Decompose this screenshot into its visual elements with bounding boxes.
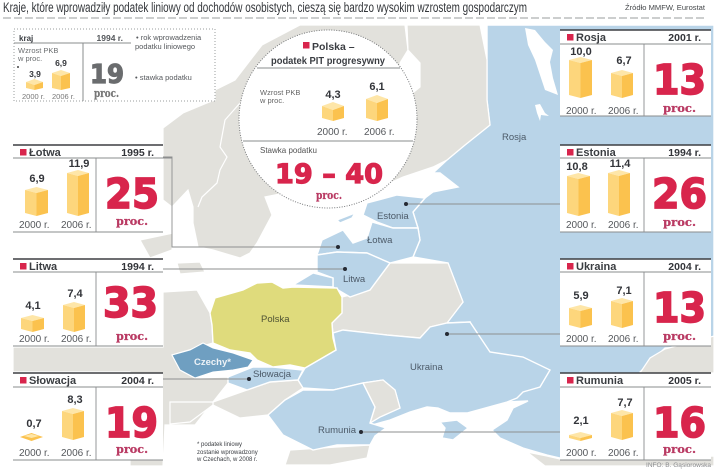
panel: Ukraina: proc. (663, 330, 696, 343)
Romania (268, 383, 386, 450)
panel: Rumunia: 2000 r. (566, 448, 597, 459)
panel: Litwa: 4,1 (25, 300, 41, 312)
Estonia (363, 195, 425, 228)
panel: Polska circle: w proc. (259, 96, 284, 105)
legend: 6,9 (55, 58, 67, 68)
Ukraine (298, 322, 550, 425)
panel: Ukraina: Ukraina (576, 261, 617, 273)
Crimea (440, 420, 468, 440)
Balkans (170, 402, 213, 424)
map labels: Litwa (343, 274, 366, 285)
panel: Rosja: 2000 r. (566, 106, 597, 117)
panel: Rosja (560, 30, 711, 117)
panel: Ukraina: 7,1 (616, 285, 632, 297)
credit: INFO: B. Gąsiorowska (646, 462, 711, 469)
panel: Łotwa: 11,9 (69, 158, 89, 170)
panel: Łotwa: 25 (105, 170, 159, 218)
panel: Łotwa: 2000 r. (19, 220, 50, 231)
Belarus (332, 263, 463, 338)
map labels: Czechy* (194, 357, 231, 368)
panel: Polska circle: proc. (316, 189, 342, 202)
map labels: Rumunia (318, 425, 357, 436)
panel: Ukraina: 2006 r. (608, 334, 639, 345)
panel: Łotwa: proc. (116, 215, 148, 228)
Scandinavia (163, 25, 408, 258)
connector lines (163, 157, 560, 434)
panel: Litwa: 7,4 (67, 288, 84, 300)
footnote: zostanie wprowadzony (197, 450, 258, 456)
legend: 3,9 (29, 69, 41, 79)
panel: Słowacja: 2004 r. (121, 375, 154, 387)
panel: Rumunia: 7,7 (617, 397, 633, 409)
panel: Polska circle: 4,3 (325, 89, 341, 101)
panel: Estonia: proc. (663, 216, 696, 229)
panel: Słowacja: Słowacja (29, 375, 77, 387)
panel: Estonia: 11,4 (610, 158, 631, 170)
panel: Rumunia: 2006 r. (608, 448, 639, 459)
panel: Litwa: proc. (116, 330, 148, 343)
panel: Łotwa (13, 145, 172, 232)
footnote (196, 442, 258, 463)
panel: Estonia: 26 (652, 170, 707, 218)
legend: Wzrost PKB (18, 46, 58, 55)
panel: Litwa: 1994 r. (121, 261, 154, 273)
map labels: Łotwa (367, 235, 393, 246)
legend: 19 (90, 60, 124, 90)
panel: Łotwa: Łotwa (29, 147, 62, 159)
panel: Rosja: 10,0 (570, 46, 592, 58)
panel: Ukraina (560, 259, 711, 346)
legend (14, 29, 215, 101)
panel: Litwa: 2000 r. (19, 334, 50, 345)
legend: • rok wprowadzenia (136, 33, 202, 42)
map labels: Słowacja (253, 369, 292, 380)
panel: Rumunia (560, 373, 711, 460)
panel: Polska circle: 2000 r. (317, 127, 348, 138)
panel: Rosja: 13 (653, 56, 706, 104)
panel: Rumunia: 2005 r. (668, 375, 701, 387)
Denmark (140, 233, 173, 258)
Turkey and Caucasus (640, 336, 714, 373)
source: Źródło MMFW, Eurostat (625, 3, 706, 12)
panel: Ukraina: 5,9 (573, 290, 589, 302)
panel: Estonia: Estonia (576, 147, 617, 159)
panel: Rumunia: 16 (653, 399, 706, 447)
panel: Słowacja: proc. (116, 443, 148, 456)
panel: Estonia: 2000 r. (566, 220, 597, 231)
map labels (194, 132, 527, 436)
panel: Ukraina: 2004 r. (668, 261, 701, 273)
Lithuania (317, 252, 390, 297)
panel: Rosja: 2001 r. (668, 32, 701, 44)
panel: Łotwa: 1995 r. (121, 147, 154, 159)
footnote: * podatek liniowy (197, 442, 242, 448)
legend: 2006 r. (52, 92, 75, 101)
footnote: w Czechach, w 2008 r. (196, 457, 258, 463)
panel: Polska circle: Stawka podatku (260, 146, 317, 155)
legend: w proc. (17, 54, 42, 63)
panel: Litwa: 2006 r. (61, 334, 92, 345)
legend: proc. (94, 87, 119, 100)
title: Kraje, które wprowadziły podatek liniowy od dochodów osobistych, cieszą się bardzo wysokim wzrostem gospodarczym (3, 0, 527, 15)
White Sea (525, 28, 558, 95)
panel: Ukraina: 13 (653, 284, 706, 332)
panel: Rosja: 6,7 (616, 55, 632, 67)
panel: Rumunia: proc. (663, 443, 696, 456)
map labels: Ukraina (410, 362, 443, 373)
panel: Słowacja: 19 (105, 399, 158, 447)
panel: Słowacja (13, 373, 163, 460)
panel: Słowacja: 2000 r. (19, 448, 50, 459)
panel: Rumunia: 2,1 (573, 415, 589, 427)
map labels: Estonia (377, 211, 409, 222)
map labels: Polska (261, 314, 290, 325)
map labels: Rosja (502, 132, 527, 143)
panel: Słowacja: 0,7 (26, 418, 42, 430)
panel: Polska circle: podatek PIT progresywny (271, 55, 385, 67)
panel: Litwa: Litwa (29, 261, 58, 273)
legend: podatku liniowego (135, 42, 195, 51)
legend: kraj (19, 34, 33, 43)
panel: Polska circle: 6,1 (369, 81, 385, 93)
Finland (380, 25, 490, 185)
Russia (413, 25, 714, 460)
panel: Estonia: 2006 r. (608, 220, 639, 231)
panel: Rosja: proc. (663, 102, 696, 115)
legend: • stawka podatku (135, 73, 192, 82)
panel: Łotwa: 6,9 (29, 173, 45, 185)
panel: Rumunia: Rumunia (576, 375, 624, 387)
panel: Słowacja: 2006 r. (61, 448, 92, 459)
Kaliningrad (293, 273, 333, 287)
panel: Litwa: 33 (103, 279, 158, 327)
Poland (210, 282, 342, 368)
panel: Polska circle (239, 30, 417, 208)
panel: Polska circle: 2006 r. (364, 127, 395, 138)
panel: Rosja: Rosja (576, 32, 607, 44)
panel: Ukraina: 2000 r. (566, 334, 597, 345)
panel: Słowacja: 8,3 (67, 394, 83, 406)
panel: Polska circle: Wzrost PKB (260, 88, 300, 97)
Latvia (317, 222, 420, 263)
panel: Estonia: 1994 r. (668, 147, 701, 159)
legend: 1994 r. (97, 33, 123, 43)
panel: Litwa (13, 259, 163, 346)
panel: Estonia: 10,8 (566, 161, 588, 173)
panel: Rosja: 2006 r. (608, 106, 639, 117)
Slovakia (228, 367, 303, 390)
panel: Polska circle: 19 – 40 (275, 159, 383, 190)
Western Europe (13, 290, 228, 466)
panel: Estonia (560, 145, 711, 232)
panel: Polska circle: Polska – (312, 41, 355, 53)
Czech Republic (172, 343, 253, 378)
Moldova (363, 380, 400, 423)
Bulgaria (285, 445, 370, 465)
panel: Łotwa: 2006 r. (61, 220, 92, 231)
Hungary (213, 380, 303, 418)
legend: 2000 r. (22, 92, 45, 101)
